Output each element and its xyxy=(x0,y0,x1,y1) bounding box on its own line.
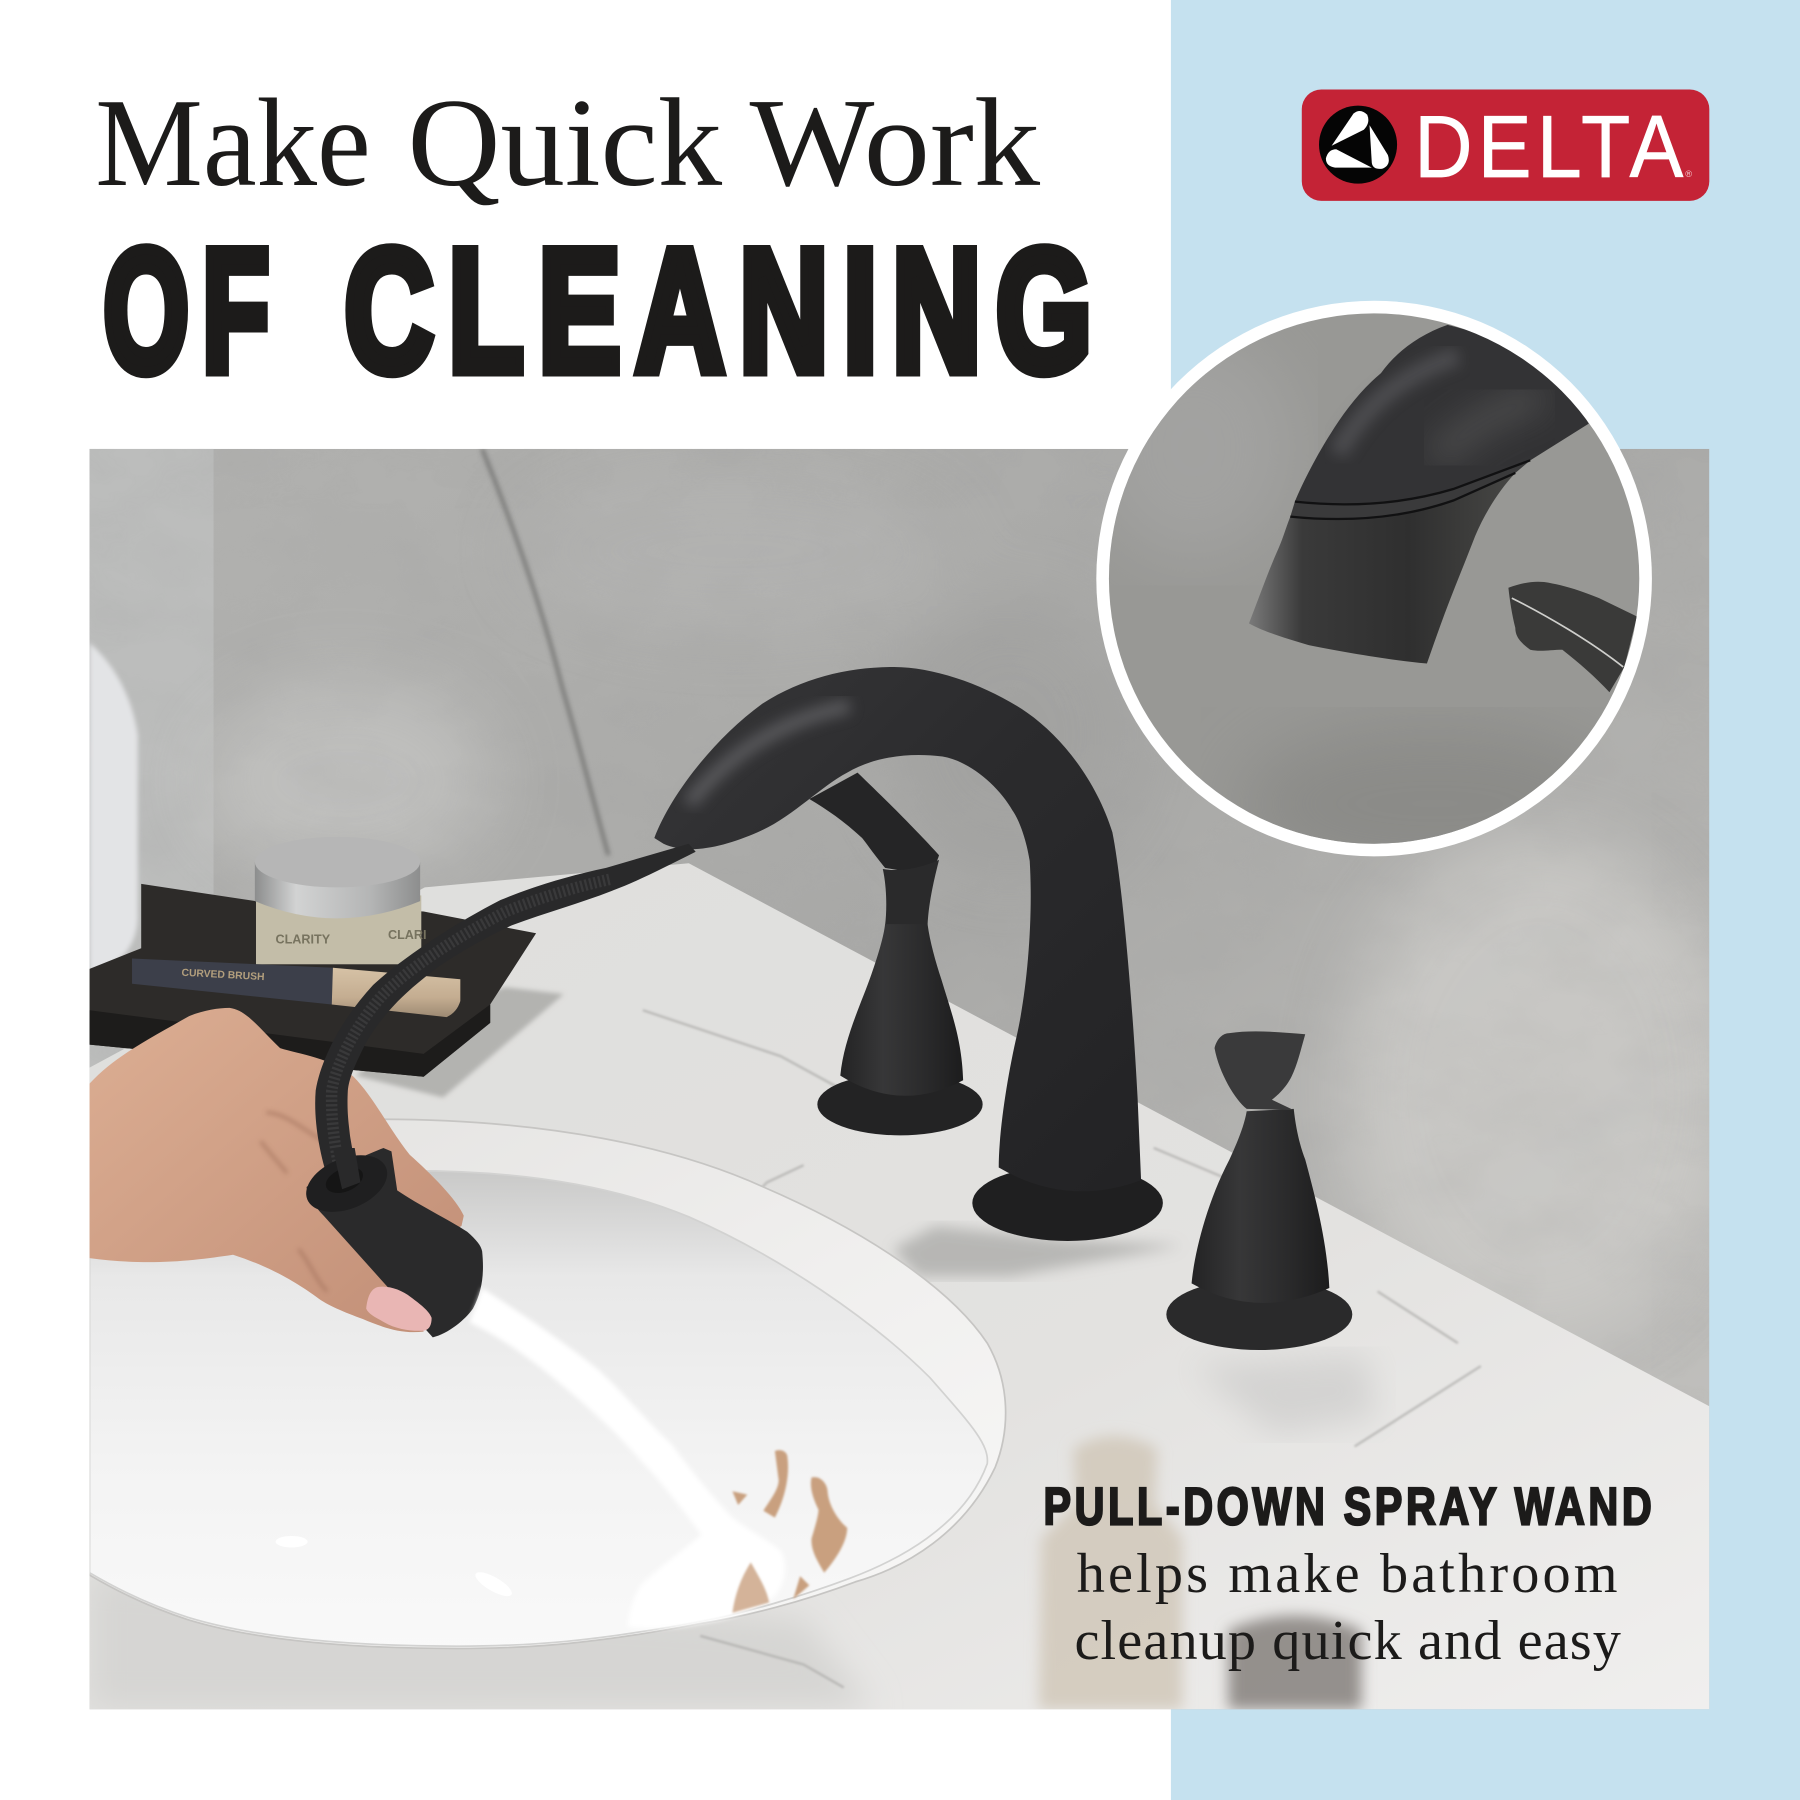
faucet handle: front xyxy=(1166,1031,1352,1350)
headline: Make Quick Work: Quick xyxy=(408,73,723,213)
faucet handle: back xyxy=(809,773,983,1135)
jar: CLARITY xyxy=(276,933,331,947)
caption line 1: helps make bathroom xyxy=(1077,1543,1617,1605)
sink xyxy=(90,1119,1006,1648)
handle in close-up xyxy=(1508,582,1637,692)
headline: OF CLEANING: OF xyxy=(103,213,282,408)
bottle on left xyxy=(90,643,138,973)
wall xyxy=(90,449,1709,1709)
inset circle: spout close-up xyxy=(1091,298,1665,884)
icon: Delta tri-petal mark xyxy=(1319,106,1397,184)
water spray xyxy=(470,1288,785,1628)
foreground blurred bottle xyxy=(1039,1436,1361,1709)
panel: blue background block xyxy=(1171,0,1800,1800)
finger crease xyxy=(261,1112,327,1291)
faucet spout xyxy=(654,667,1163,1241)
logo: Delta xyxy=(1302,90,1709,201)
sink rim xyxy=(90,1119,1006,1648)
caption xyxy=(1043,1477,1655,1672)
panel: bathroom photo xyxy=(90,449,1733,1709)
spray wand xyxy=(298,1144,483,1337)
curved brush: CURVED BRUSH xyxy=(181,968,265,983)
curved brush xyxy=(132,959,460,1017)
seam band xyxy=(1290,460,1530,519)
jar xyxy=(254,862,426,964)
headline: Make Quick Work: Work xyxy=(750,73,1041,213)
sink basin xyxy=(90,1171,987,1646)
headline: Make Quick Work: Make xyxy=(95,73,371,213)
jar: CLARI xyxy=(388,928,427,942)
spout close-up xyxy=(1295,325,1589,504)
wall marble texture xyxy=(90,449,1709,1436)
thumbnail xyxy=(366,1287,432,1331)
hose xyxy=(315,844,696,1184)
caption line 2: cleanup quick and easy xyxy=(1074,1610,1621,1672)
registered mark: ® xyxy=(1685,169,1692,179)
tray shadow xyxy=(356,987,564,1097)
nozzle close-up xyxy=(1249,473,1515,664)
headline: OF CLEANING: CLEANING xyxy=(344,213,1107,408)
makeup smear xyxy=(732,1450,847,1613)
counter xyxy=(90,863,1709,1709)
tray xyxy=(90,884,536,1077)
headline: Make Quick Work xyxy=(95,73,1041,213)
shadow under faucet xyxy=(893,1226,1182,1277)
headline: OF CLEANING xyxy=(103,213,1107,408)
logo wordmark: DELTA xyxy=(1414,97,1689,196)
hand xyxy=(90,1008,464,1332)
wall vein xyxy=(482,449,608,855)
